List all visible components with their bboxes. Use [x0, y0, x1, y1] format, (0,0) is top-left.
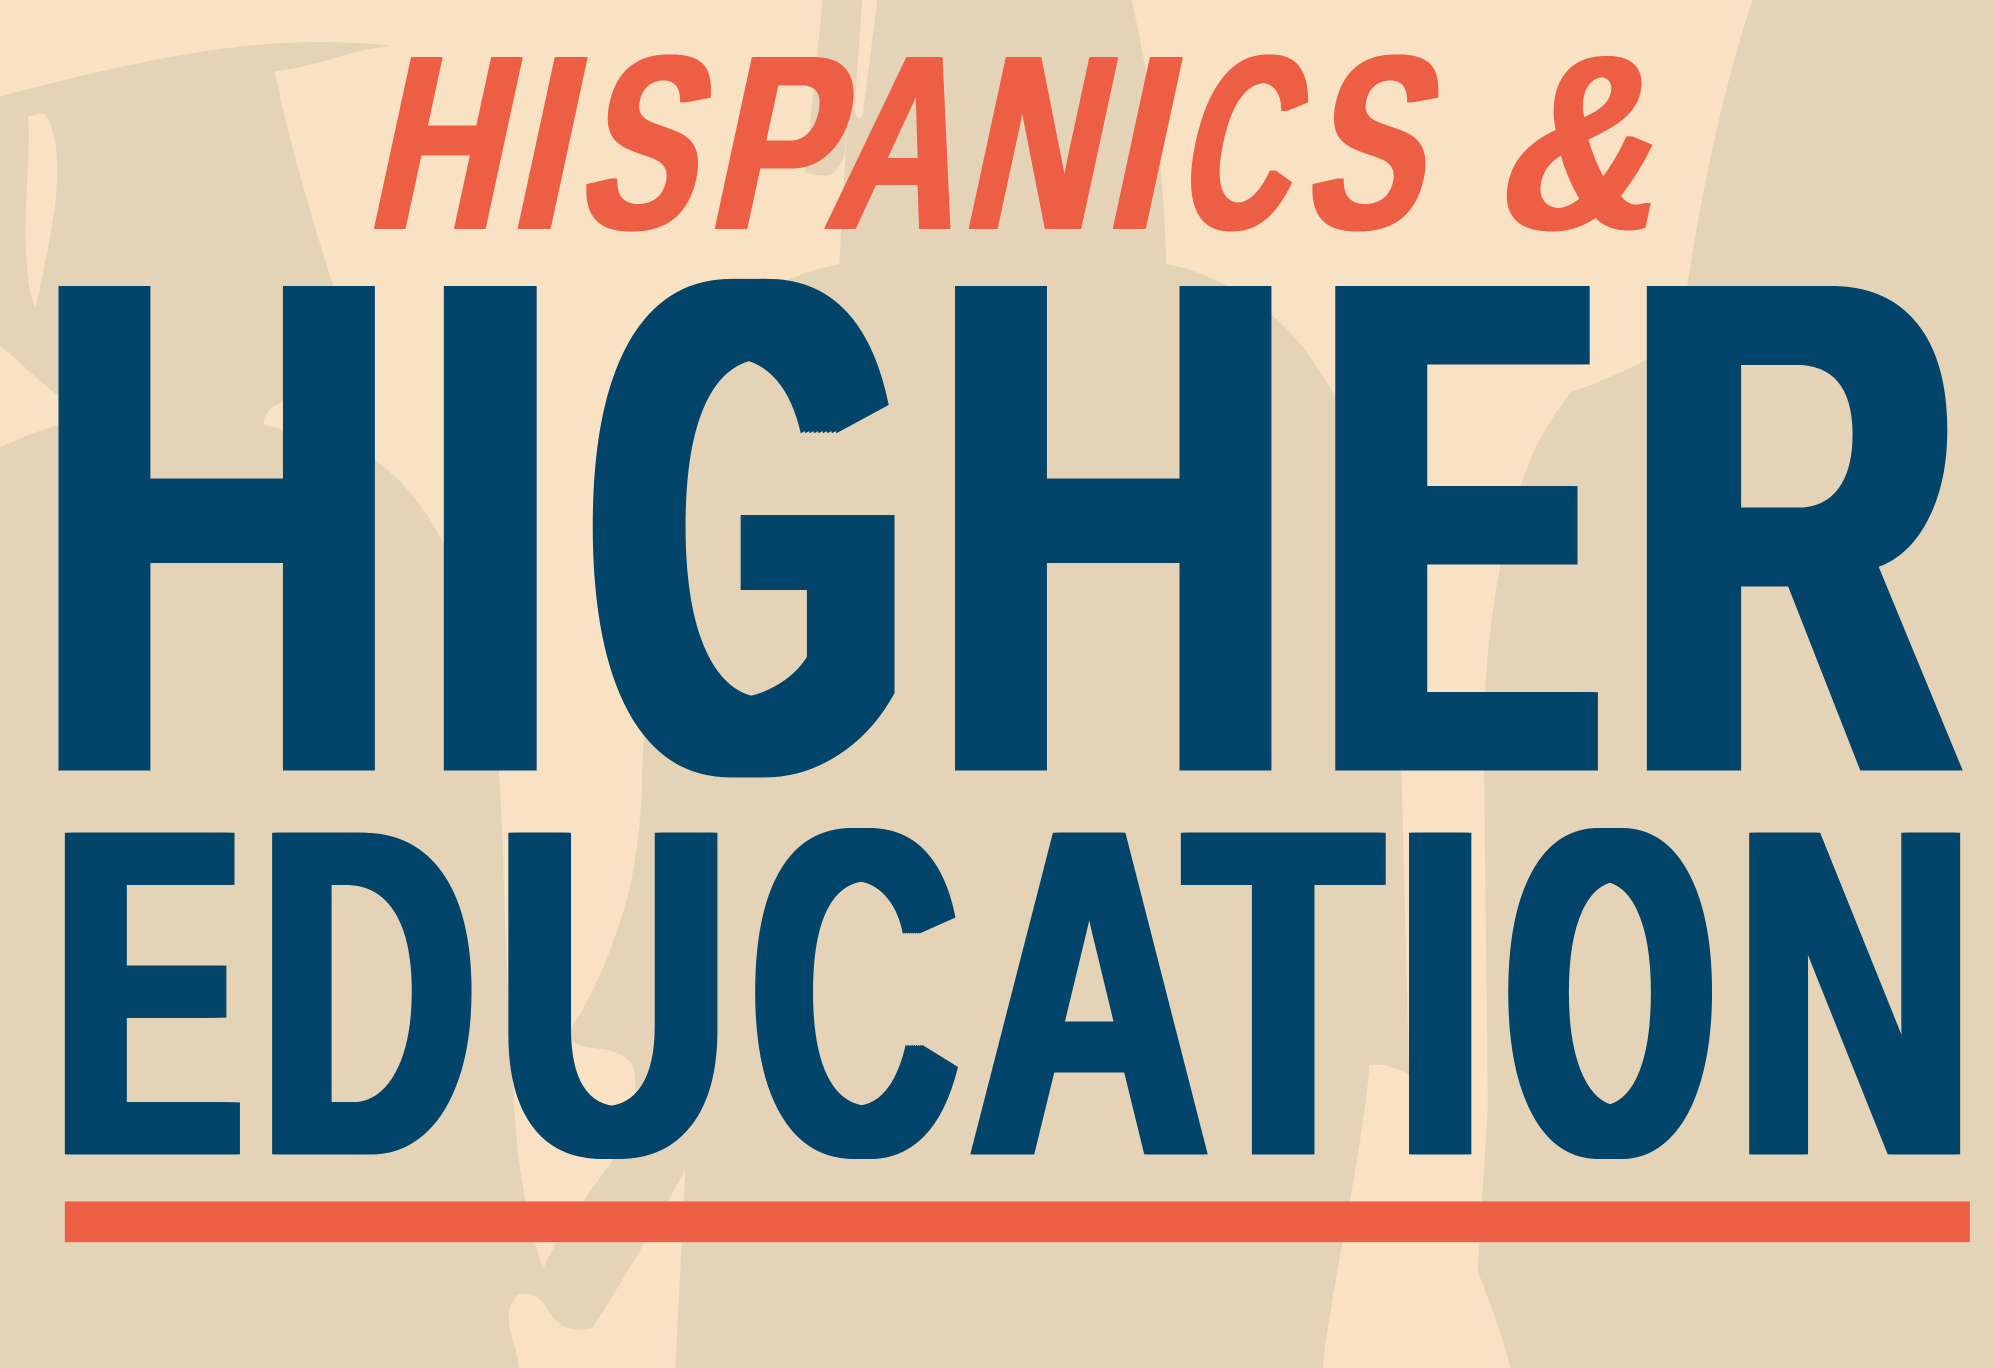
heading: Higher: E	[1308, 134, 1581, 920]
heading: Education: N	[1727, 731, 1966, 1253]
heading: Hispanics &: P	[691, 2, 876, 282]
heading: Higher: R	[1617, 134, 1943, 920]
heading: Education	[47, 731, 1966, 1253]
heading: Higher: H	[25, 134, 390, 920]
heading: Hispanics &: I	[493, 2, 607, 282]
heading: Education: O	[1498, 731, 1700, 1253]
heading: Hispanics &: H	[350, 2, 541, 282]
heading: Hispanics &: C	[1159, 2, 1329, 282]
heading: Education: I	[1388, 731, 1476, 1253]
heading: Higher: I	[410, 134, 552, 920]
heading: Hispanics &: S	[1286, 2, 1463, 282]
heading: Education: D	[252, 731, 468, 1253]
heading: Higher: G	[577, 134, 883, 920]
heading: Higher	[25, 134, 1963, 1159]
heading: Education: E	[47, 731, 228, 1253]
heading: Hispanics &: I	[1088, 2, 1202, 282]
heading: Education: A	[962, 731, 1200, 1253]
heading: Education: U	[489, 731, 720, 1253]
heading: Hispanics &: A	[808, 2, 998, 282]
orange rule under title	[65, 1201, 1969, 1242]
heading: Hispanics &: &	[1477, 2, 1695, 282]
heading: Hispanics &: S	[560, 2, 735, 282]
heading: Education: T	[1177, 731, 1373, 1253]
heading: Hispanics &: N	[945, 2, 1137, 282]
heading: Hispanics &	[348, 2, 1960, 1159]
heading: Higher: H	[921, 134, 1286, 920]
heading: Education: C	[743, 731, 949, 1253]
